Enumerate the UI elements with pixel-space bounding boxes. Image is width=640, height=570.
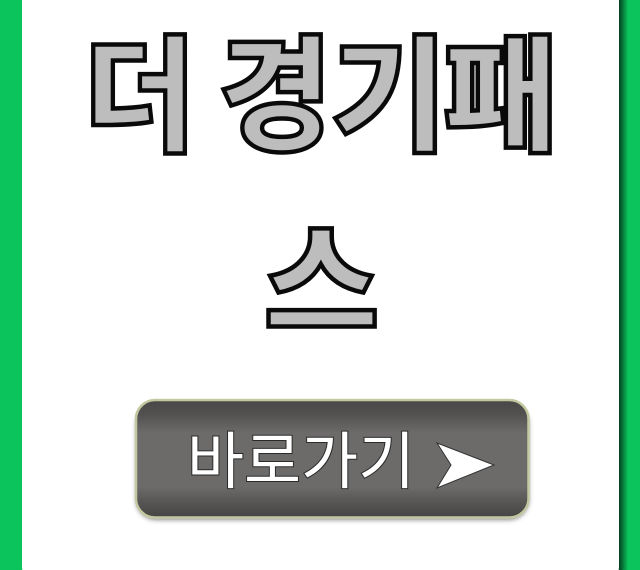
title glyph 4: 패 xyxy=(443,27,559,168)
button shadow xyxy=(136,404,529,520)
title glyph 5: 스 xyxy=(264,216,379,355)
button label: 바로가기 xyxy=(187,428,415,497)
panel: right edge shadow xyxy=(618,0,628,570)
icon: arrow xyxy=(437,443,494,488)
title glyph 2: 경 xyxy=(218,28,332,168)
button: go shortcut xyxy=(136,400,529,520)
title xyxy=(84,27,559,355)
title glyph 1: 더 xyxy=(84,28,196,168)
button body xyxy=(136,400,528,518)
title glyph 3: 기 xyxy=(331,27,447,168)
